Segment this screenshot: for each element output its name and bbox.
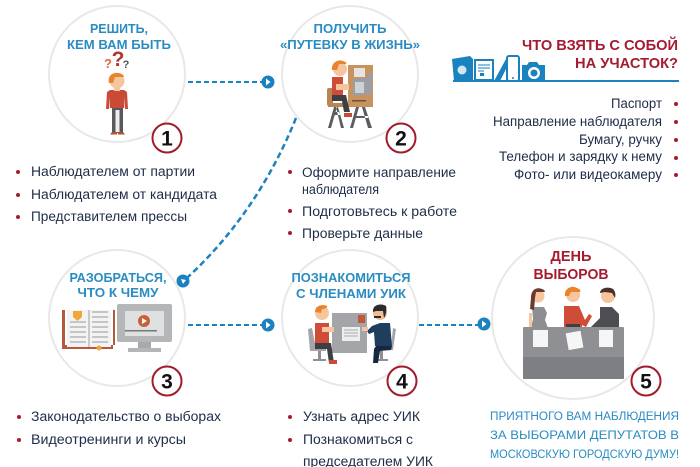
icon: video monitor <box>117 304 172 352</box>
heading: step 1: КЕМ ВАМ БЫТЬ <box>67 38 171 52</box>
panel: step 2 <box>280 6 420 152</box>
heading: step 3: ЧТО К ЧЕМУ <box>78 286 159 300</box>
closing message <box>490 411 679 461</box>
arrow: step 1 to step 2 <box>188 76 274 88</box>
icon: man in red <box>564 287 592 330</box>
closing message: МОСКОВСКУЮ ГОРОДСКУЮ ДУМУ! <box>490 449 679 461</box>
panel: step 1 <box>49 6 185 152</box>
heading: step 1 <box>67 22 171 52</box>
list: step 1: Наблюдателем от кандидата <box>31 187 218 202</box>
icon: phone <box>507 56 519 81</box>
list: step 3: Видеотренинги и курсы <box>31 432 186 447</box>
icon: person at kiosk <box>327 60 373 128</box>
list: step 2: Подготовьтесь к работе <box>302 204 457 219</box>
number badge 5: 5 <box>640 370 652 394</box>
heading: step 2: ПОЛУЧИТЬ <box>314 22 387 36</box>
icon: question marks: ? <box>112 48 124 71</box>
heading: step 2: «ПУТЕВКУ В ЖИЗНЬ» <box>280 38 420 52</box>
arrow: step 4 to step 5 <box>419 318 490 330</box>
list: step 4: Познакомиться с <box>303 432 413 447</box>
number badge 2 <box>386 124 416 152</box>
list: what to bring: Телефон и зарядку к нему <box>499 149 662 164</box>
icon: question marks: ? <box>104 56 112 71</box>
panel: what to bring <box>452 36 679 182</box>
icon: person in red <box>308 305 337 364</box>
list: step 3 <box>17 409 221 447</box>
icon: camera <box>522 62 545 81</box>
closing message: ПРИЯТНОГО ВАМ НАБЛЮДЕНИЯ <box>490 411 679 423</box>
number badge 2: 2 <box>395 128 407 150</box>
heading: what to bring: НА УЧАСТОК? <box>575 55 678 72</box>
list: what to bring <box>493 96 678 182</box>
panel: step 4 <box>282 250 418 396</box>
icon: election table <box>523 327 624 379</box>
list: what to bring: Фото- или видеокамеру <box>514 167 662 182</box>
icon: law book <box>62 310 115 350</box>
icon: passport <box>452 56 473 81</box>
list: step 2 <box>288 165 457 241</box>
list: step 2: Проверьте данные <box>302 226 423 241</box>
icon: pen <box>494 59 510 81</box>
icon: question marks <box>104 48 130 71</box>
heading: step 4: С ЧЛЕНАМИ УИК <box>296 287 406 301</box>
icon: standing person <box>106 73 128 134</box>
number badge 1: 1 <box>161 128 173 150</box>
list: step 1: Представителем прессы <box>31 209 187 224</box>
icon: document <box>475 60 493 80</box>
number badge 5 <box>632 366 660 396</box>
list: what to bring: Паспорт <box>611 96 662 111</box>
icon: woman <box>529 288 548 328</box>
list: what to bring: Направление наблюдателя <box>493 114 662 129</box>
panel: step 3 <box>49 250 185 396</box>
heading: step 4: ПОЗНАКОМИТЬСЯ <box>292 271 411 285</box>
list: what to bring: Бумагу, ручку <box>579 132 662 147</box>
icon: question marks: ? <box>123 59 130 71</box>
arrow: step 3 to step 4 <box>188 318 274 332</box>
arrow: step 2 to step 3 <box>176 118 296 288</box>
list: step 2: Оформите направление <box>302 165 456 180</box>
list: step 3: Законодательство о выборах <box>31 409 221 424</box>
heading: step 3: РАЗОБРАТЬСЯ, <box>70 271 166 285</box>
heading: step 2 <box>280 22 420 52</box>
number badge 1 <box>152 124 182 152</box>
icon: man in dark shirt <box>591 288 619 330</box>
heading: step 3 <box>70 271 166 300</box>
list: step 1: Наблюдателем от партии <box>31 164 195 179</box>
list: step 1 <box>16 164 218 224</box>
list: step 4: Узнать адрес УИК <box>303 409 420 424</box>
heading: step 5: ДЕНЬ <box>550 248 592 265</box>
heading: step 5: ВЫБОРОВ <box>534 266 609 283</box>
heading: step 4 <box>292 271 411 301</box>
icon: man in suit <box>362 304 396 363</box>
list: step 2: наблюдателя <box>302 182 379 197</box>
number badge 4: 4 <box>396 370 408 394</box>
number badge 4 <box>388 366 416 396</box>
heading: step 1: РЕШИТЬ, <box>90 22 148 36</box>
heading: what to bring: ЧТО ВЗЯТЬ С СОБОЙ <box>522 36 678 54</box>
number badge 3 <box>152 366 182 396</box>
list: step 4 <box>288 409 433 467</box>
panel: step 5 election day <box>492 237 660 399</box>
closing message: ЗА ВЫБОРАМИ ДЕПУТАТОВ В <box>490 430 679 442</box>
number badge 3: 3 <box>161 370 173 394</box>
icon: meeting table <box>332 313 367 353</box>
heading: step 5 <box>534 248 609 283</box>
heading: what to bring <box>522 36 678 72</box>
